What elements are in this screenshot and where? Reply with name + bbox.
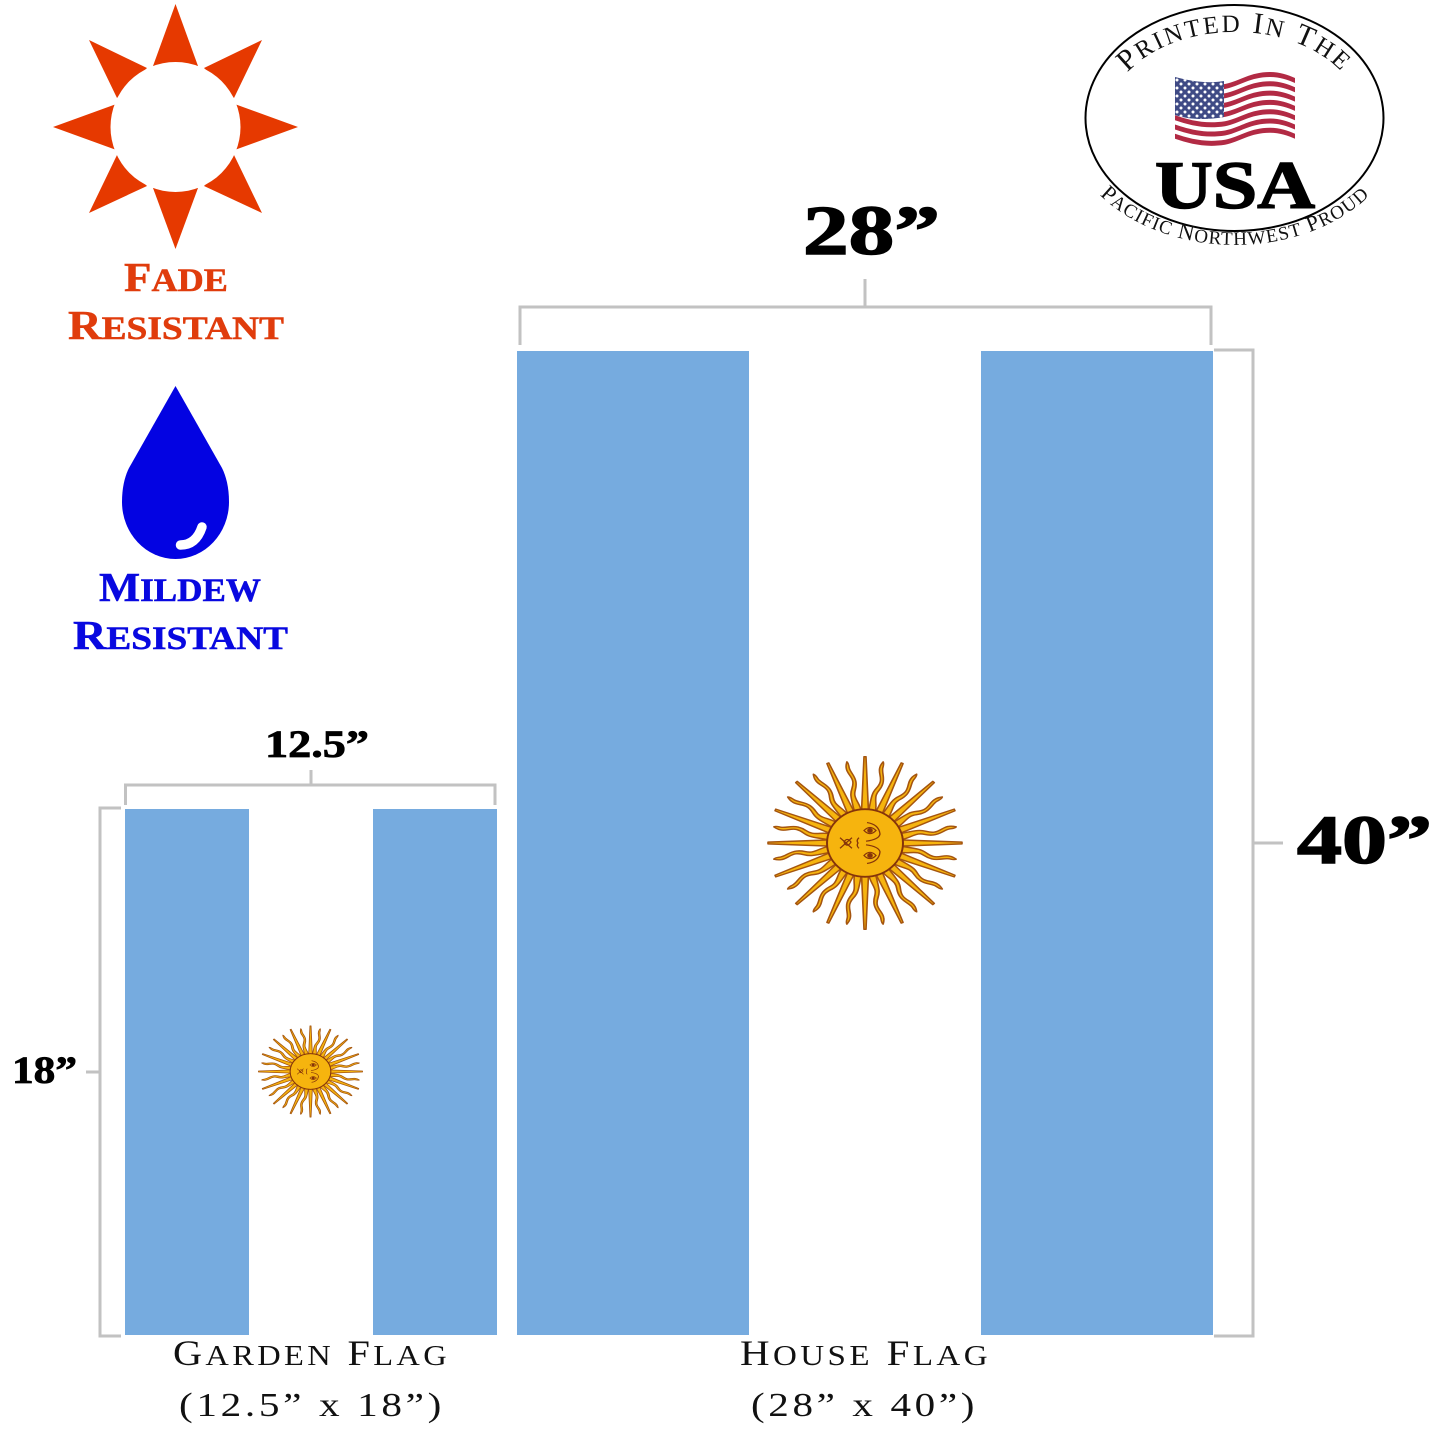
badge top text: PRINTED IN THE <box>1114 13 1350 72</box>
caption: house flag: (28” x 40”) <box>751 1387 978 1424</box>
icon: sun of May large <box>767 756 963 930</box>
badge bottom text: PACIFIC NORTHWEST PROUD <box>1100 184 1367 245</box>
dimension: house flag width <box>520 193 1211 345</box>
caption: garden flag: GARDEN FLAG <box>173 1333 450 1373</box>
badge USA wordmark: USA <box>1155 147 1315 223</box>
caption: house flag <box>740 1333 991 1424</box>
label: 40 inches: 40” <box>1297 802 1432 878</box>
badge: printed in the USA <box>1084 4 1384 245</box>
label: 12.5 inches: 12.5” <box>265 723 369 766</box>
garden flag <box>125 809 497 1335</box>
heading: mildew resistant: MILDEW <box>99 564 261 610</box>
heading: mildew resistant: RESISTANT <box>73 612 288 658</box>
icon: water drop <box>122 386 229 559</box>
heading: mildew resistant <box>73 564 288 658</box>
icon: fade resistant sun <box>53 4 298 249</box>
icon: sun of May small <box>258 1025 363 1118</box>
dimension: garden flag height <box>12 808 121 1336</box>
label: 28 inches: 28” <box>803 193 940 270</box>
heading: fade resistant: FADE <box>124 254 228 300</box>
dimension: garden flag width <box>126 723 495 805</box>
house flag <box>517 351 1213 1335</box>
caption: house flag: HOUSE FLAG <box>740 1333 991 1373</box>
icon: american flag <box>1175 72 1295 146</box>
caption: garden flag: (12.5” x 18”) <box>179 1387 445 1424</box>
caption: garden flag <box>173 1333 450 1424</box>
heading: fade resistant <box>68 254 284 348</box>
label: 18 inches: 18” <box>12 1049 77 1092</box>
heading: fade resistant: RESISTANT <box>68 302 284 348</box>
dimension: house flag height <box>1214 350 1432 1336</box>
